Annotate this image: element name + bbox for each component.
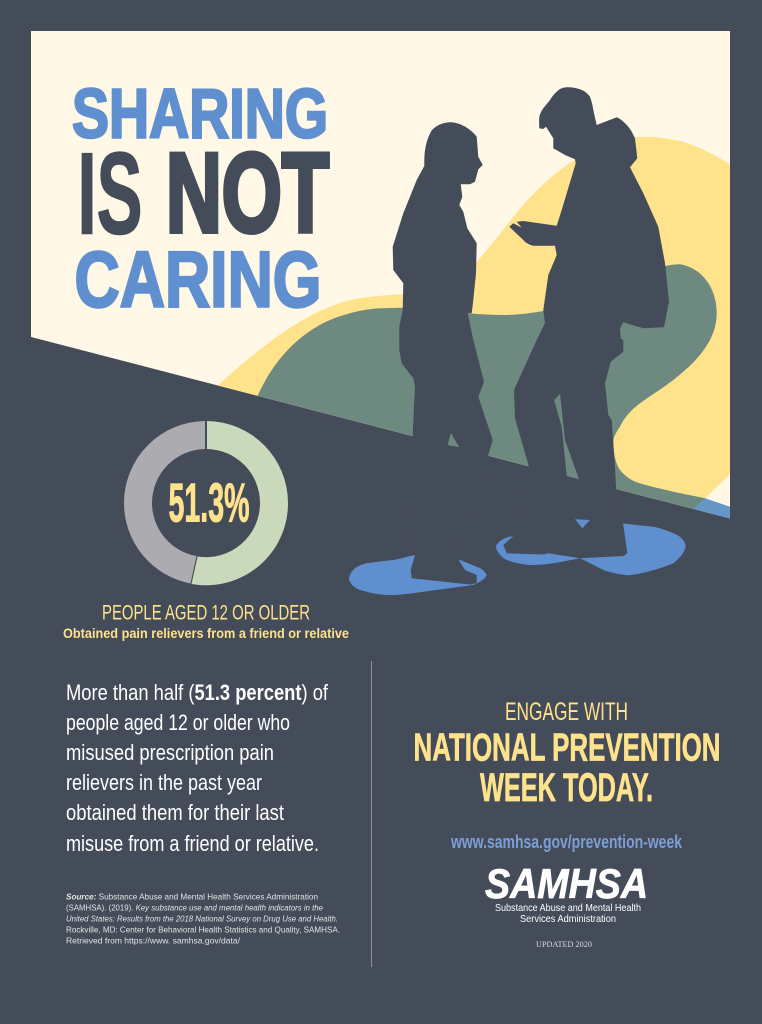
source citation: (SAMHSA). (2019). Key substance use and mental health indicators in the: [66, 903, 323, 913]
donut caption heading: PEOPLE AGED 12 OR OLDER: [102, 602, 310, 624]
updated date: UPDATED 2020: [536, 939, 592, 949]
title line: IS NOT: NOT: [166, 131, 329, 256]
donut segment: 51.3 percent: [192, 421, 288, 585]
silhouette: woman: [393, 122, 493, 584]
body paragraph: obtained them for their last: [66, 800, 284, 825]
title: [72, 75, 329, 324]
source citation: United States: Results from the 2018 National Survey on Drug Use and Health.: [66, 914, 338, 924]
title line: CARING: CARING: [74, 234, 322, 324]
gap between woman's legs: [448, 433, 459, 447]
body paragraph: More than half (51.3 percent) of: [66, 680, 329, 705]
yellow hill: [215, 137, 731, 500]
gap between man's legs: [554, 394, 579, 479]
source citation: [66, 892, 340, 945]
vertical divider: [371, 661, 372, 967]
call to action: [414, 698, 720, 810]
website url: www.samhsa.gov/prevention-week: [450, 832, 683, 852]
donut value: 51.3%: [168, 472, 250, 534]
title line: IS NOT: IS: [78, 128, 142, 258]
source citation: Source: Substance Abuse and Mental Health Services Administration: [66, 892, 318, 902]
SAMHSA logo: Substance Abuse and Mental Health: [495, 902, 641, 914]
blue shadow: right foot: [496, 515, 686, 575]
call to action: WEEK TODAY.: [480, 766, 653, 810]
body paragraph: people aged 12 or older who: [66, 710, 290, 735]
donut caption detail: Obtained pain relievers from a friend or relative: [63, 625, 349, 641]
title line: IS NOT: [78, 128, 329, 258]
call to action: ENGAGE WITH: [505, 698, 628, 726]
body paragraph: relievers in the past year: [66, 770, 262, 795]
source citation: Rockville, MD: Center for Behavioral Health Statistics and Quality, SAMHSA.: [66, 924, 340, 934]
gap between man's feet: [575, 519, 590, 528]
SAMHSA logo: Services Administration: [520, 913, 616, 925]
body paragraph: misused prescription pain: [66, 740, 274, 765]
title line: SHARING: SHARING: [72, 75, 328, 153]
blue corner sliver: [693, 498, 730, 520]
body paragraph: misuse from a friend or relative.: [66, 831, 319, 856]
donut segment: remainder: [124, 421, 205, 584]
body paragraph: [66, 680, 329, 856]
source citation: Retrieved from https://www. samhsa.gov/data/: [66, 935, 241, 945]
SAMHSA logo: [485, 860, 648, 925]
SAMHSA logo: SAMHSA: [485, 860, 648, 907]
green hill: [255, 264, 717, 525]
donut chart 51.3%: [124, 421, 288, 585]
panel: hero illustration background: [31, 31, 731, 525]
silhouette: man: [503, 87, 669, 558]
blue shadow: left foot: [349, 555, 487, 595]
